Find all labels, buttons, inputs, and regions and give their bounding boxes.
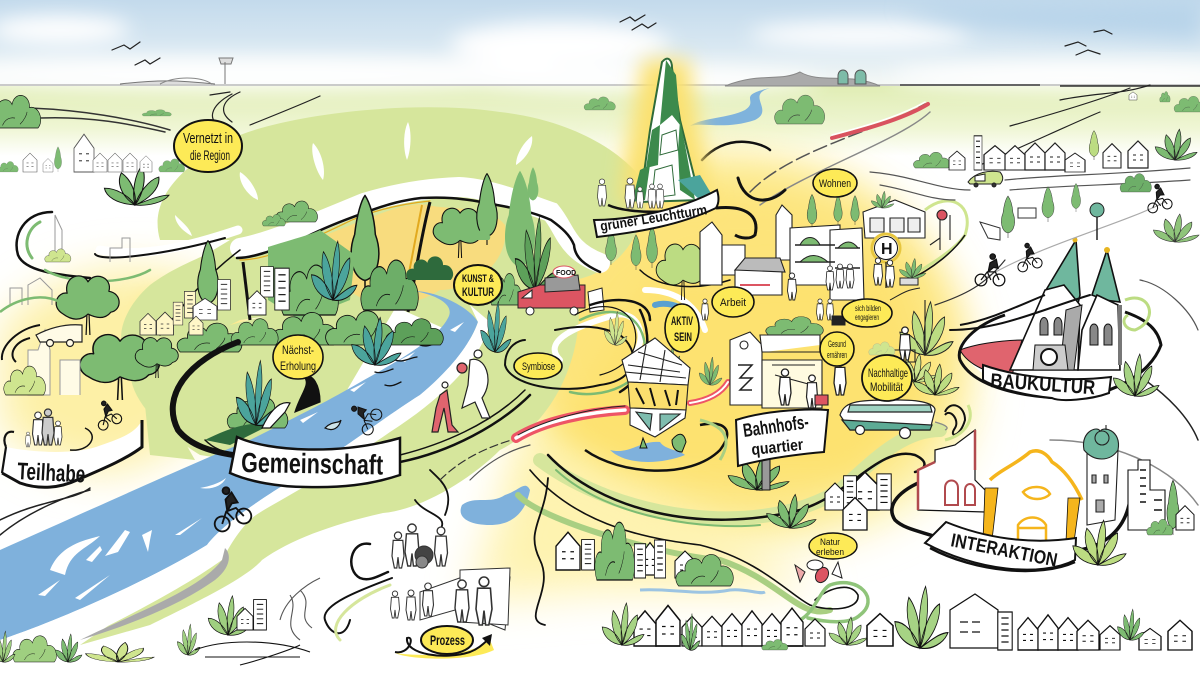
label: Vernetzt in die Region xyxy=(174,120,242,172)
bottom skyline xyxy=(634,594,1192,650)
converging green paths xyxy=(325,430,940,640)
label: Gesund ernähren: Gesund xyxy=(828,339,846,349)
distant river xyxy=(690,88,770,126)
label: Aktiv sein xyxy=(665,304,699,352)
train passing the centre xyxy=(516,382,728,438)
banner: grüner Leuchtturm: grüner Leuchtturm xyxy=(599,201,708,234)
lake under the central building xyxy=(585,420,727,471)
water glints xyxy=(38,322,464,600)
small distant bush marks xyxy=(142,95,1200,124)
sign: Bahnhofsquartier: quartier xyxy=(751,437,804,459)
banner: Interaktion xyxy=(925,522,1076,572)
banner: Teilhabe: Teilhabe xyxy=(17,458,86,489)
label: Kunst und Kultur xyxy=(454,265,502,305)
bottom plants xyxy=(602,586,1144,650)
sign: Bahnhofsquartier: Bahnhofs- xyxy=(742,412,810,442)
label: Aktiv sein: SEIN xyxy=(674,330,692,344)
label: Kunst und Kultur: KULTUR xyxy=(462,285,494,299)
process people group xyxy=(390,524,510,630)
grey path edge xyxy=(80,548,229,640)
Gemeinschaft loop arc xyxy=(173,342,530,462)
Interaktion ring xyxy=(892,480,1130,550)
label: Aktiv sein: AKTIV xyxy=(671,314,693,328)
people reading and biking by the river xyxy=(204,377,384,534)
distant railway with train xyxy=(702,102,930,205)
yellow labels xyxy=(174,120,912,559)
teal dome tower xyxy=(1083,425,1119,525)
upper right skyline xyxy=(913,91,1197,172)
small houses at left xyxy=(140,280,230,335)
label: Arbeit xyxy=(712,287,754,317)
label: sich bilden engagieren: sich bilden xyxy=(855,304,881,313)
white ribbon road over the dome xyxy=(100,187,600,263)
town below Bahnhofsquartier xyxy=(825,472,891,530)
yellow clearing under the road xyxy=(318,204,505,305)
label: Vernetzt in die Region: die Region xyxy=(190,147,230,163)
sign: Bahnhofsquartier xyxy=(736,409,828,490)
label: Nachhaltige Mobilität: Nachhaltige xyxy=(868,366,908,380)
label: Symbiose: Symbiose xyxy=(522,361,555,373)
blue stream lake at the south xyxy=(461,486,530,525)
big light green dome and river banks xyxy=(80,107,650,645)
banner: Gemeinschaft: Gemeinschaft xyxy=(241,447,383,480)
plant at Baukultur banner xyxy=(1113,354,1159,396)
label: Nächsterholung xyxy=(273,335,323,379)
H bus stop sign xyxy=(872,234,900,288)
plant at Interaktion banner xyxy=(1073,520,1126,565)
central left building xyxy=(622,338,690,437)
tree with bench xyxy=(869,300,953,362)
banner: Baukultur: BAUKULTUR xyxy=(990,370,1096,399)
label: Vernetzt in die Region: Vernetzt in xyxy=(183,130,233,147)
cathedral on a ring xyxy=(959,238,1161,398)
label: Nachhaltige Mobilität xyxy=(862,355,912,401)
banner: Gemeinschaft xyxy=(230,437,400,487)
label: Natur erleben: erleben xyxy=(816,547,844,557)
food truck: FOOD xyxy=(556,270,576,277)
label: Gesund ernähren xyxy=(820,332,854,366)
label: Nächsterholung: Erholung xyxy=(280,359,316,373)
distant roads and birds xyxy=(30,15,1150,165)
yellow label: Prozess with arrow xyxy=(395,626,494,659)
trees inside the green dome xyxy=(56,167,538,445)
label: Natur erleben xyxy=(809,533,857,559)
white path along the river xyxy=(0,305,490,640)
banner: Teilhabe xyxy=(2,420,142,489)
golden baroque facade xyxy=(983,450,1082,550)
north building cluster xyxy=(700,194,864,300)
bikes on the field road xyxy=(975,182,1173,286)
ball players xyxy=(432,350,490,432)
people at the tower xyxy=(598,178,664,208)
field trees and cows xyxy=(980,174,1199,242)
H bus stop sign: H xyxy=(881,241,893,258)
country roads right xyxy=(870,168,1198,330)
tall buildings at right xyxy=(1128,460,1194,535)
banner: grüner Leuchtturm xyxy=(594,190,719,237)
label: Nachhaltige Mobilität: Mobilität xyxy=(870,380,903,394)
group of people at Teilhabe xyxy=(26,409,62,447)
cyclist near Teilhabe xyxy=(90,397,123,432)
label: Wohnen: Wohnen xyxy=(819,178,851,190)
teal reed plants xyxy=(236,217,557,425)
label: sich bilden engagieren xyxy=(842,299,892,327)
faded towers at left xyxy=(10,215,130,395)
sky with clouds xyxy=(0,0,1200,92)
banner: Interaktion: INTERAKTION xyxy=(949,530,1059,572)
bus left xyxy=(36,325,82,346)
trunks xyxy=(243,202,430,320)
right central building with roof garden xyxy=(730,317,846,408)
red brick building xyxy=(918,430,985,512)
label: Wohnen xyxy=(813,169,857,197)
station building xyxy=(863,191,967,282)
black swoosh beside banner xyxy=(716,207,756,238)
label: Gesund ernähren: ernähren xyxy=(827,350,847,360)
river xyxy=(0,291,478,640)
label: Symbiose xyxy=(514,353,562,379)
ladybird and nature icons xyxy=(795,560,842,585)
yellow label: Prozess with arrow: Prozess xyxy=(430,632,465,648)
green tower: grüner Leuchtturm xyxy=(608,59,716,212)
round cycle sign xyxy=(1090,203,1104,240)
water strip xyxy=(640,590,765,593)
flowing curves around Symbiose xyxy=(505,270,730,394)
road lines lower left xyxy=(0,370,1198,535)
food truck xyxy=(518,266,604,315)
label: sich bilden engagieren: engagieren xyxy=(855,313,879,322)
dome highlight petals xyxy=(175,122,532,236)
left bush small xyxy=(0,95,169,395)
light green large bush xyxy=(656,244,959,528)
left skyline xyxy=(0,134,185,172)
label: Kunst und Kultur: KUNST & xyxy=(462,273,494,285)
white houses under the road xyxy=(248,267,289,315)
horizon with airport and distant town xyxy=(0,58,1200,86)
label: Nächsterholung: Nächst- xyxy=(282,343,314,357)
label: Arbeit: Arbeit xyxy=(720,297,746,309)
loop of black stroke left and people xyxy=(0,297,60,362)
people north of centre xyxy=(702,258,926,325)
water ripples xyxy=(375,342,442,386)
road outline black xyxy=(17,198,600,335)
car xyxy=(968,171,1003,187)
poplars near centre xyxy=(604,226,722,385)
lower left bushes and town xyxy=(0,578,320,665)
town near the lake xyxy=(556,522,733,586)
bus xyxy=(840,400,970,440)
label: Natur erleben: Natur xyxy=(820,537,840,547)
